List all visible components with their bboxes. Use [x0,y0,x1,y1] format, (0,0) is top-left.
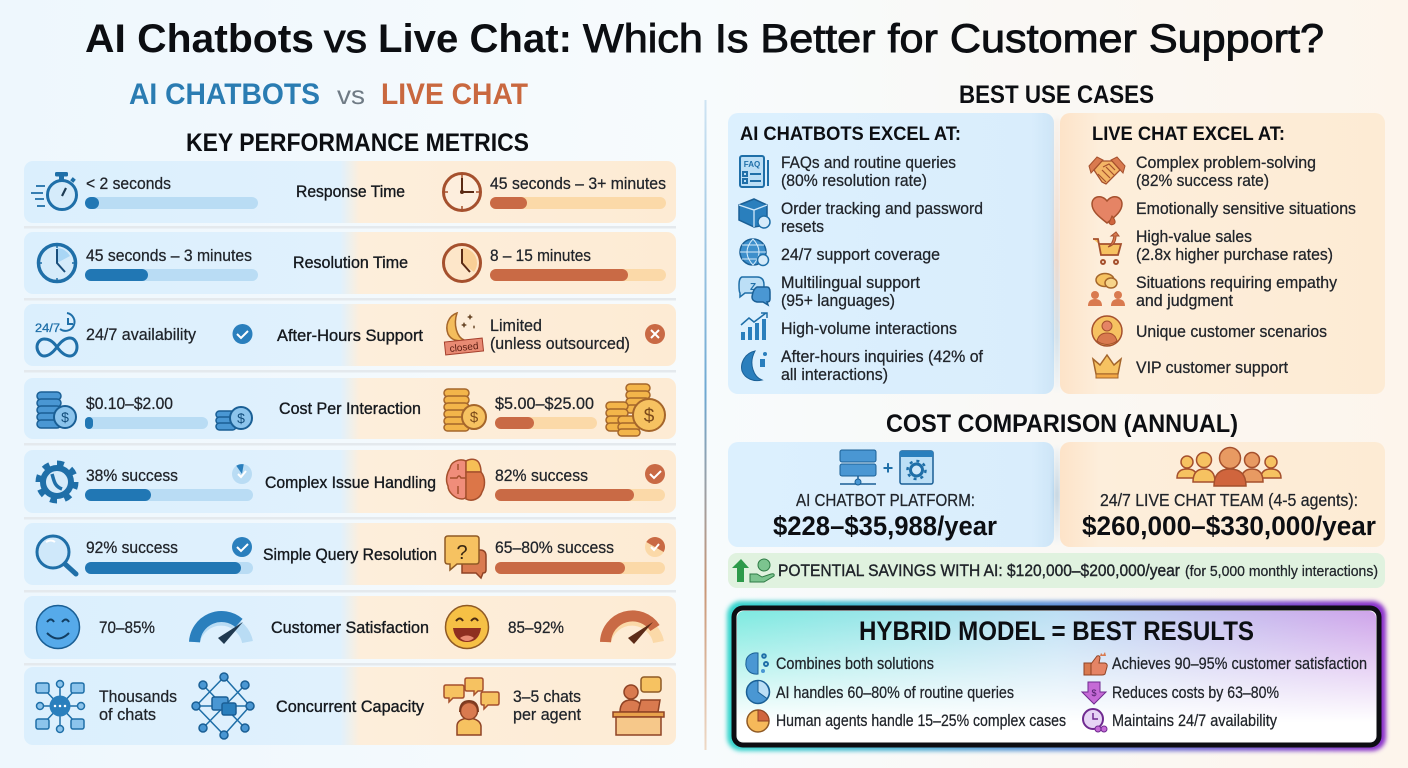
text: complex: (82% success rate) [1136,172,1269,190]
icon: rising chart [741,313,767,340]
icon: moon [742,351,767,381]
title [85,17,1324,61]
text: complex [1136,154,1316,190]
text: multilingual: (95+ languages) [781,292,895,310]
text: FAQs [781,154,956,190]
row: resolution time: 8 – 15 minutes [490,247,591,265]
panel: potential savings: (for 5,000 monthly interactions) [1185,563,1378,580]
title: vs [324,17,367,61]
icon: brain network [746,653,768,674]
icon: FAQ document [740,156,768,187]
left comparison heading [129,78,528,111]
icon: small blue coins: $ [237,410,245,426]
text: situations: Situations requiring empathy [1136,274,1338,292]
title: Live Chat: [378,17,572,61]
text: complex: Complex problem-solving [1136,154,1316,172]
panel: live chat team cost: $260,000–$330,000/year [1082,511,1376,541]
panel: hybrid model [727,601,1386,751]
icon: check badge [645,464,665,484]
icon: server plus settings: + [883,458,893,478]
row: simple query resolution: Simple Query Resolution [263,546,437,564]
icon: gear [38,463,76,501]
panel: live chat excel at: VIP customer support [1136,359,1288,377]
row: after-hours support: 24/7 availability [86,326,197,344]
icon: question bubbles: ? [456,542,468,564]
row: response time: < 2 seconds [86,175,171,193]
text: after-hours: After-hours inquiries (42% of [781,348,983,366]
row: resolution time: 45 seconds – 3 minutes [86,247,252,265]
title: Which Is Better for Customer Support? [583,17,1324,61]
panel: hybrid model: Combines both solutions [776,655,934,673]
row: customer satisfaction: Customer Satisfaction [271,619,429,637]
row: cost per interaction: $0.10–$2.00 [86,395,173,413]
text: FAQs: FAQs and routine queries [781,154,956,172]
icon: globe [740,239,768,266]
icon: gold coins [444,389,486,431]
row: response time: Response Time [296,183,405,201]
text: after-hours [781,348,983,384]
text: chats per agent [513,688,581,724]
row: customer satisfaction: 70–85% [99,619,155,637]
text: limited [490,317,630,353]
icon: check badge [232,537,252,557]
panel: hybrid model: Maintains 24/7 availability [1112,712,1278,730]
heading: best use cases: BEST USE CASES [959,81,1154,109]
icon: server plus settings [840,450,933,485]
text: order tracking: resets [781,218,824,236]
panel: AI chatbot platform cost: $228–$35,988/year [773,511,997,541]
panel: hybrid model: Reduces costs by 63–80% [1112,684,1279,702]
icon: down arrow [1082,682,1106,704]
text: high-value: High-value sales [1136,228,1252,246]
row: customer satisfaction [24,596,676,659]
text: multilingual [781,274,920,310]
icon: laughing face [446,606,488,648]
icon: chat hub [36,680,84,732]
icon: gold coins: $ [470,409,479,426]
icon: chat network [192,673,254,739]
icon: stopwatch [31,172,76,210]
row: complex issue handling: Complex Issue Handling [265,474,436,492]
gauge: AI satisfaction [194,617,248,644]
divider between use case panels [1056,118,1058,390]
icon: translate bubbles: Z [750,282,756,293]
icon: moon closed sign: closed [449,341,479,355]
bar: live simple [495,562,665,574]
text: limited: Limited [490,317,542,335]
icon: FAQ document: FAQ [744,160,760,169]
text: thousands of chats: of chats [99,706,156,724]
heading: key performance metrics: KEY PERFORMANCE METRICS [186,129,529,157]
row: complex issue handling [24,450,676,513]
left comparison heading: LIVE CHAT [381,78,528,111]
title: AI Chatbots [85,17,314,61]
icon: smile face [36,606,80,648]
icon: orange pie [747,710,769,732]
icon: magnifier [37,536,76,574]
row: resolution time: Resolution Time [293,254,408,272]
row: simple query resolution: 65–80% success [495,539,614,557]
text: high-value [1136,228,1333,264]
icon: blue pie [746,680,770,704]
icon: thumbs up [1084,652,1107,675]
row: cost per interaction: $5.00–$25.00 [495,395,594,413]
bar: AI response time [85,197,258,209]
row: concurrent capacity [24,667,676,745]
panel: metrics table [24,161,676,745]
row: complex issue handling: 82% success [495,467,588,485]
left comparison heading: vs [337,80,365,110]
panel: AI chatbots excel at [728,113,1054,394]
icon: people with bubbles [1088,274,1125,306]
icon: handshake [1089,157,1125,184]
panel: live chat excel at: Unique customer scenarios [1136,323,1327,341]
row: response time: 45 seconds – 3+ minutes [490,175,666,193]
icon: support team [1177,448,1281,486]
panel: live chat excel at: LIVE CHAT EXCEL AT: [1092,124,1285,145]
icon: clock [444,174,480,210]
text: high-value: (2.8x higher purchase rates) [1136,246,1333,264]
icon: 24/7 infinity [35,313,77,356]
text: after-hours: all interactions) [781,366,888,384]
bar: live resolution time [490,269,666,281]
icon: 24/7 infinity: 24/7 [35,321,60,335]
row: response time [24,161,676,223]
bar: AI resolution time [85,269,258,281]
panel: potential savings [728,553,1385,588]
icon: check badge [232,324,252,344]
icon: agent with bubbles [444,678,499,735]
divider between cost panels [1056,448,1058,542]
icon: partial check [232,462,252,484]
row: complex issue handling: 38% success [86,467,178,485]
panel: potential savings: POTENTIAL SAVINGS WITH AI: $120,000–$200,000/year [778,561,1180,580]
icon: question bubbles [445,536,486,578]
icon: translate bubbles [739,277,770,305]
text: FAQs: (80% resolution rate) [781,172,927,190]
icon: purple clock [1083,709,1107,732]
icon: blue coins: $ [61,409,69,425]
panel: AI chatbots excel at: 24/7 support coverage [781,246,940,264]
icon: cross badge [645,324,665,344]
icon: small blue coins [216,407,252,430]
panel: hybrid model: Human agents handle 15–25% complex cases [776,712,1066,730]
bar: AI simple [85,562,253,574]
icon: user circle [1092,316,1122,346]
bar: live response time [490,197,666,209]
icon: savings arrow and hand [732,559,774,582]
panel: live chat excel at [1060,113,1385,394]
text: order tracking [781,200,983,236]
panel: live chat team cost [1060,442,1385,547]
heading: cost comparison: COST COMPARISON (ANNUAL) [886,410,1238,438]
icon: crown [1093,355,1121,378]
panel: live chat team cost: 24/7 LIVE CHAT TEAM (4-5 agents): [1100,490,1358,510]
icon: blue clock [38,244,76,282]
panel: live chat excel at: Emotionally sensitive situations [1136,200,1356,218]
text: chats per agent: per agent [513,706,581,724]
bar: AI complex [85,489,253,501]
icon: big gold coins [606,384,665,436]
vertical divider [704,100,706,750]
gauge: live satisfaction [606,616,658,644]
icon: orange clock [444,244,480,282]
icon: puzzle brain [447,459,484,500]
text: situations [1136,274,1338,310]
text: order tracking: Order tracking and password [781,200,983,218]
icon: down arrow: $ [1091,688,1097,698]
bar: AI cost [85,417,208,429]
icon: heart [1092,197,1122,225]
icon: package [739,199,770,228]
row: cost per interaction: Cost Per Interaction [279,400,421,418]
panel: hybrid model: Achieves 90–95% customer satisfaction [1112,655,1367,673]
icon: agent at desk [613,677,664,735]
text: multilingual: Multilingual support [781,274,920,292]
bar: live cost [495,417,597,429]
row: simple query resolution [24,523,676,585]
left comparison heading: AI CHATBOTS [129,78,320,111]
icon: big gold coins: $ [644,406,655,427]
row: resolution time [24,232,676,294]
text: thousands of chats [99,688,177,724]
bar: live complex [495,489,665,501]
row: after-hours support: After-Hours Support [277,327,423,345]
icon: shopping cart [1093,232,1121,264]
icon: blue coins [37,392,76,428]
icon: moon closed sign [444,313,484,355]
text: limited: (unless outsourced) [490,335,630,353]
text: chats per agent: 3–5 chats [513,688,581,706]
row: customer satisfaction: 85–92% [508,619,564,637]
panel: AI chatbots excel at: AI CHATBOTS EXCEL AT: [740,124,961,145]
icon: partial check [645,533,669,557]
row: concurrent capacity: Concurrent Capacity [276,698,425,716]
row: simple query resolution: 92% success [86,539,178,557]
panel: hybrid model: HYBRID MODEL = BEST RESULTS [859,616,1254,646]
panel: AI chatbot platform cost: AI CHATBOT PLATFORM: [796,490,975,510]
row: cost per interaction [24,378,676,439]
row: after-hours support [24,304,676,366]
text: situations: and judgment [1136,292,1233,310]
panel: hybrid model: AI handles 60–80% of routine queries [776,684,1014,702]
panel: AI chatbots excel at: High-volume interactions [781,320,957,338]
panel: AI chatbot platform cost [728,442,1054,547]
text: thousands of chats: Thousands [99,688,177,706]
